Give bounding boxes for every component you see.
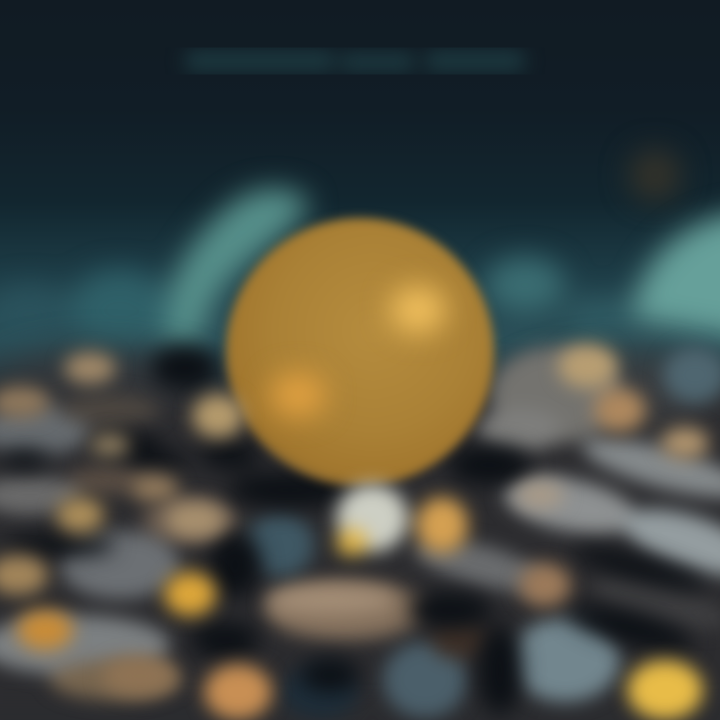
faint amber glow top right (629, 149, 681, 201)
dark gaps between coins (0, 346, 711, 715)
dark pile base (0, 352, 720, 720)
pile of coins: grey and dark slabs (0, 347, 720, 718)
blurred title smudge (185, 50, 525, 72)
teal waves (0, 188, 720, 350)
sphere highlights (270, 286, 446, 417)
warm coin highlights (0, 344, 709, 720)
golden sphere (226, 218, 494, 486)
